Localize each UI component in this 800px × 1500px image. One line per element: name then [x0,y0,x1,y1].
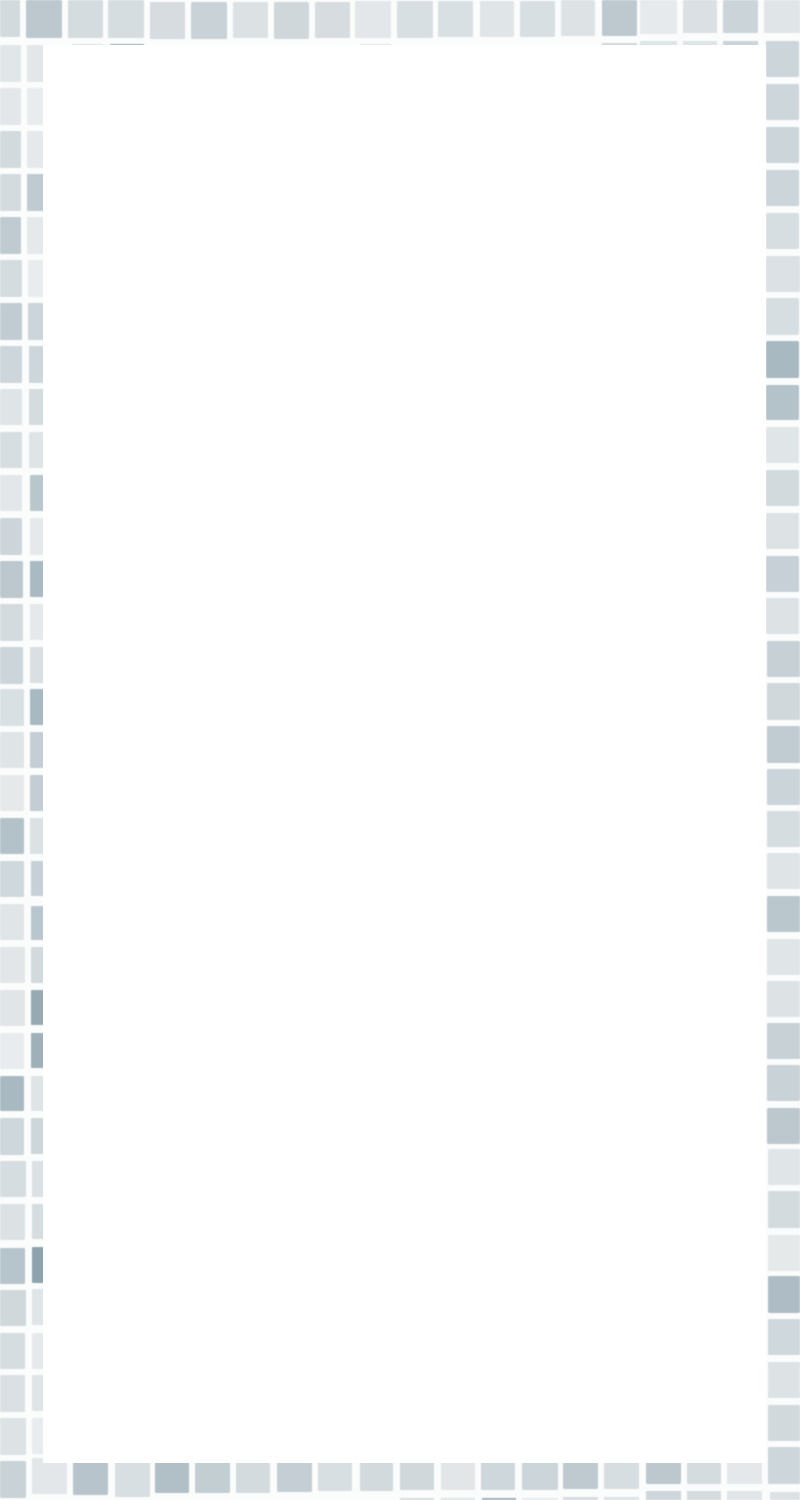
right column of tiles [766,41,800,1500]
left outer column of tiles [0,45,26,1498]
top row of tiles [0,0,800,46]
left inner column of tiles [27,45,67,1494]
bottom row of tiles [73,1462,762,1500]
